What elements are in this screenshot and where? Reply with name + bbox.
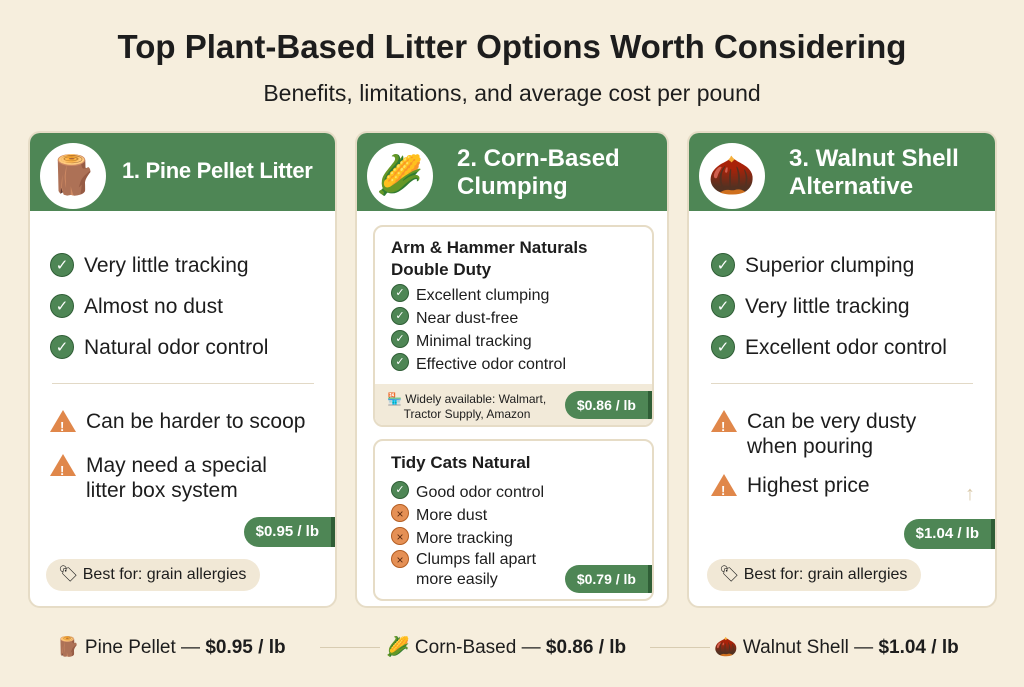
bottom cost summary: 🌽 Corn-Based — $0.86 / lb <box>386 637 626 658</box>
cons list: May need a special <box>86 454 267 477</box>
header: corn <box>357 133 667 211</box>
subcard: tidy cats: more easily <box>416 571 498 588</box>
bottom cost summary: 🪵 Pine Pellet — $0.95 / lb <box>56 637 286 658</box>
pros list <box>711 253 947 359</box>
subcard: arm & hammer: Arm & Hammer Naturals <box>391 238 588 257</box>
bottom cost summary <box>56 636 959 658</box>
subcard: arm & hammer: $0.86 / lb <box>577 397 636 413</box>
best for: 🏷 Best for: grain allergies <box>58 566 246 583</box>
pros list: Very little tracking <box>84 254 249 277</box>
pros list: ✓ <box>717 298 729 315</box>
price tag <box>904 519 995 549</box>
pros list: ✓ <box>56 257 68 274</box>
cons list: when pouring <box>747 435 873 458</box>
pros list: Almost no dust <box>84 295 223 318</box>
subcard: tidy cats: $0.79 / lb <box>577 571 636 587</box>
header: pine <box>30 133 335 211</box>
pros list: ✓ <box>56 339 68 356</box>
header: walnut: 🌰 <box>708 155 756 197</box>
subcard: tidy cats: Good odor control <box>416 484 544 501</box>
cons list: ! <box>60 463 64 478</box>
title: Top Plant-Based Litter Options Worth Considering <box>118 28 906 65</box>
cons list: ! <box>721 419 725 434</box>
pros list: Excellent odor control <box>745 336 947 359</box>
subcard: arm & hammer: ✓ <box>395 287 405 299</box>
subcard: tidy cats: More tracking <box>416 530 513 547</box>
bottom cost summary: 🌰 Walnut Shell — $1.04 / lb <box>714 637 959 658</box>
panel: walnut <box>687 131 997 608</box>
subcard: tidy cats <box>373 439 654 601</box>
pros list: Superior clumping <box>745 254 914 277</box>
header: corn: 2. Corn-Based <box>457 145 620 172</box>
cons list: litter box system <box>86 479 238 502</box>
subcard: tidy cats: Clumps fall apart <box>416 551 536 568</box>
subcard: arm & hammer: ✓ <box>395 333 405 345</box>
cons list: ! <box>721 483 725 498</box>
subcard: arm & hammer <box>373 225 654 427</box>
subcard: arm & hammer: Effective odor control <box>416 356 566 373</box>
arrow: up: ↑ <box>965 483 975 505</box>
cons list: Highest price <box>747 474 870 497</box>
cons list: Can be harder to scoop <box>86 410 305 433</box>
best for <box>707 559 921 591</box>
subcard: arm & hammer: Near dust-free <box>416 310 518 327</box>
panel: pine pellet <box>28 131 337 608</box>
cons list <box>711 410 916 498</box>
header: pine: 🪵 <box>49 155 97 197</box>
subcard: tidy cats: × <box>396 507 404 521</box>
cons list <box>50 410 305 502</box>
cons list: Can be very dusty <box>747 410 916 433</box>
subcard: tidy cats: ✓ <box>395 484 405 496</box>
subtitle: Benefits, limitations, and average cost per pound <box>263 80 761 106</box>
cons list: ! <box>60 419 64 434</box>
price tag <box>244 517 335 547</box>
subcard: arm & hammer: ✓ <box>395 356 405 368</box>
panel: corn <box>355 131 669 608</box>
subcard: tidy cats: × <box>396 553 404 567</box>
header: corn: 🌽 <box>376 155 424 197</box>
best for <box>46 559 260 591</box>
subcard: tidy cats: × <box>396 530 404 544</box>
header: walnut: Alternative <box>789 173 913 200</box>
header: pine: 1. Pine Pellet Litter <box>122 158 313 183</box>
header: walnut: 3. Walnut Shell <box>789 145 959 172</box>
pros list: ✓ <box>717 257 729 274</box>
subcard: tidy cats: Tidy Cats Natural <box>391 453 531 472</box>
pros list <box>50 253 268 359</box>
best for: 🏷 Best for: grain allergies <box>719 566 907 583</box>
subcard: arm & hammer: ✓ <box>395 310 405 322</box>
header: walnut <box>689 133 995 211</box>
pros list: Very little tracking <box>745 295 910 318</box>
pros list: Natural odor control <box>84 336 268 359</box>
pros list: ✓ <box>56 298 68 315</box>
subcard: arm & hammer: Double Duty <box>391 260 491 279</box>
pros list: ✓ <box>717 339 729 356</box>
subcard: arm & hammer: Minimal tracking <box>416 333 532 350</box>
price tag: $1.04 / lb <box>916 525 979 542</box>
subcard: arm & hammer: Excellent clumping <box>416 287 549 304</box>
header: corn: Clumping <box>457 173 568 200</box>
subcard: tidy cats: More dust <box>416 507 487 524</box>
subcard: arm & hammer: 🏪 Widely available: Walmart, <box>387 392 546 406</box>
price tag: $0.95 / lb <box>256 523 319 540</box>
subcard: arm & hammer: Tractor Supply, Amazon <box>404 407 530 421</box>
